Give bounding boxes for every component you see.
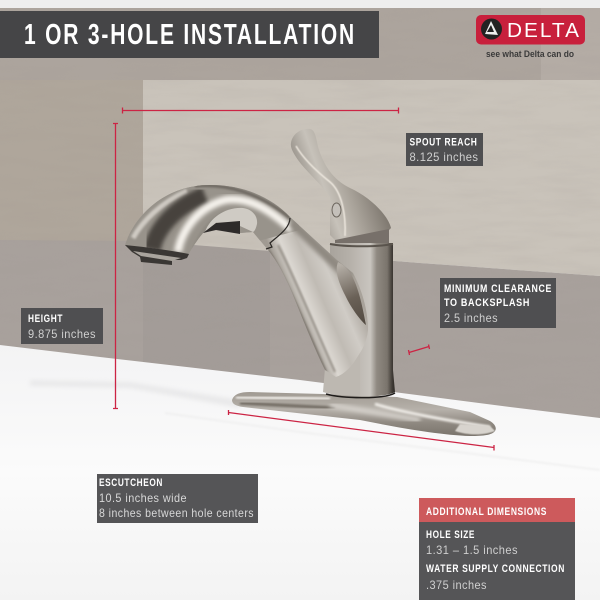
Delta logo: see what Delta can do — [486, 49, 574, 60]
hole size: HOLE SIZE — [426, 529, 475, 541]
dimension line: backsplash clearance — [408, 344, 430, 355]
callout: escutcheon — [97, 474, 258, 523]
sprayer nozzle — [125, 245, 189, 265]
callout: minimum clearance: MINIMUM CLEARANCE — [444, 283, 552, 295]
hole size — [426, 529, 518, 557]
callout: spout reach — [406, 133, 483, 166]
spout slot — [203, 221, 240, 234]
title banner: 1 OR 3-HOLE INSTALLATION — [24, 19, 356, 51]
callout: escutcheon: 10.5 inches wide — [99, 491, 187, 505]
callout: minimum clearance — [440, 278, 556, 328]
outer light band — [133, 191, 187, 238]
body rim — [330, 244, 393, 246]
Delta logo: DELTA — [507, 19, 581, 42]
callout: height: HEIGHT — [28, 313, 63, 325]
bright band — [178, 199, 292, 252]
Delta logo — [476, 15, 585, 60]
faucet — [120, 129, 500, 440]
callout: spout reach: SPOUT REACH — [410, 136, 478, 148]
head base tone — [125, 185, 299, 254]
callout: minimum clearance: 2.5 inches — [444, 311, 498, 325]
spout and neck — [125, 185, 368, 377]
lever handle — [291, 129, 391, 240]
spray face — [133, 251, 181, 261]
water supply connection: .375 inches — [426, 578, 487, 592]
top rim shading — [195, 185, 290, 218]
neck edge dark — [268, 250, 326, 372]
faucet deck plate — [232, 392, 496, 436]
callout: spout reach: 8.125 inches — [410, 150, 478, 164]
callout: height — [21, 308, 103, 344]
neck streak — [278, 245, 335, 372]
handle collar — [335, 229, 389, 243]
dark band — [152, 195, 205, 250]
spray head seam — [266, 218, 290, 249]
callout: height: 9.875 inches — [28, 327, 96, 341]
callout: minimum clearance: TO BACKSPLASH — [444, 297, 530, 309]
panel header: ADDITIONAL DIMENSIONS — [426, 506, 547, 518]
dimension line: escutcheon width — [228, 410, 494, 450]
title banner — [0, 11, 379, 58]
neck upper shading — [292, 222, 350, 278]
lower head shading — [196, 223, 210, 242]
panel: additional dimensions — [419, 498, 575, 600]
dimension line: spout reach — [122, 108, 399, 114]
callout: escutcheon: ESCUTCHEON — [99, 477, 163, 489]
spout underside panel — [205, 208, 257, 232]
lever highlights — [296, 146, 345, 236]
hot cold indicator — [332, 203, 341, 217]
hole size: 1.31 – 1.5 inches — [426, 543, 518, 557]
panel header — [419, 498, 575, 522]
callout: escutcheon: 8 inches between hole centers — [99, 506, 254, 520]
collar — [323, 350, 360, 395]
base ring — [326, 393, 395, 398]
faucet body cylinder — [330, 243, 395, 396]
water supply connection — [426, 563, 565, 592]
dimension line: height — [113, 124, 118, 408]
neck dark recess — [337, 262, 366, 325]
